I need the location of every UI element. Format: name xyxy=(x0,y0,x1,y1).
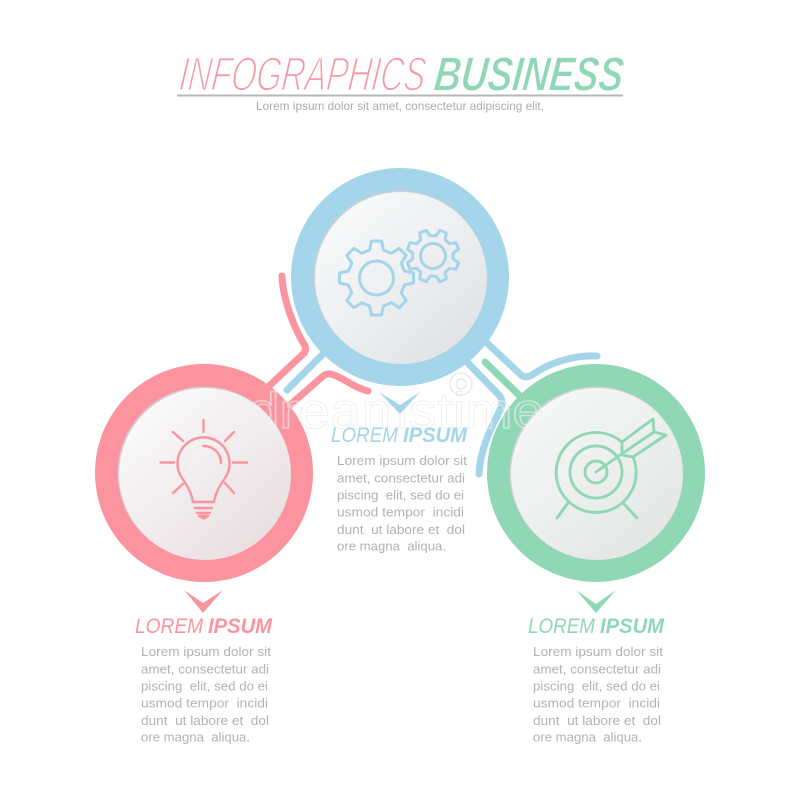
panel: blue circle xyxy=(291,168,509,386)
icon: light bulb xyxy=(160,420,247,518)
text block: green: dunt ut labore et dol xyxy=(533,713,661,728)
text block: blue: usmod tempor incidi xyxy=(337,505,464,520)
heading: green: IPSUM xyxy=(600,615,664,638)
text block: green xyxy=(533,644,663,745)
text block: green: ore magna aliqua. xyxy=(533,730,642,745)
subtitle: Lorem ipsum dolor sit amet, consectetur adipiscing elit, xyxy=(256,99,544,113)
heading: red xyxy=(135,615,272,638)
heading: red: IPSUM xyxy=(208,615,272,638)
text block: red xyxy=(141,644,271,745)
title underline xyxy=(177,94,623,96)
icon: target with arrow xyxy=(556,419,666,518)
connector: green xyxy=(485,362,522,398)
text block: red: amet, consectetur adi xyxy=(141,661,269,676)
text block: blue: ore magna aliqua. xyxy=(337,539,446,554)
connector: red upper xyxy=(268,276,306,387)
connector: blue lower right xyxy=(466,361,502,474)
title xyxy=(177,48,626,101)
heading: blue: LOREM xyxy=(331,424,398,447)
text block: green: piscing elit, sed do ei xyxy=(533,679,660,694)
connector: blue upper right xyxy=(486,342,597,377)
text block: blue: piscing elit, sed do ei xyxy=(337,488,464,503)
connectors xyxy=(268,276,597,474)
title word: business: BUSINESS xyxy=(432,48,626,101)
title word: infographics: INFOGRAPHICS xyxy=(177,48,428,101)
text block: blue: dunt ut labore et dol xyxy=(337,522,465,537)
text block: red: ore magna aliqua. xyxy=(141,730,250,745)
text block: blue xyxy=(337,453,467,554)
text block: green: amet, consectetur adi xyxy=(533,661,661,676)
watermark: dreamstime xyxy=(248,383,544,439)
heading: red: LOREM xyxy=(135,615,203,638)
text block: blue: Lorem ipsum dolor sit xyxy=(337,453,467,468)
connector: blue left xyxy=(287,352,325,390)
text block: green: usmod tempor incidi xyxy=(533,696,660,711)
heading: green xyxy=(528,615,664,638)
chevron: red xyxy=(184,590,223,613)
chevron: green xyxy=(576,590,616,613)
panel: green circle xyxy=(487,364,705,582)
chevron: blue xyxy=(379,392,420,414)
icon: gears xyxy=(340,222,467,315)
connector: red lower xyxy=(290,374,368,405)
text block: red: piscing elit, sed do ei xyxy=(141,679,268,694)
text block: green: Lorem ipsum dolor sit xyxy=(533,644,663,659)
text block: red: dunt ut labore et dol xyxy=(141,713,269,728)
text block: red: usmod tempor incidi xyxy=(141,696,268,711)
text block: red: Lorem ipsum dolor sit xyxy=(141,644,271,659)
text block: blue: amet, consectetur adi xyxy=(337,470,465,485)
heading: blue: IPSUM xyxy=(403,424,467,447)
heading: blue xyxy=(331,424,467,447)
heading: green: LOREM xyxy=(528,615,595,638)
panel: red circle xyxy=(95,364,313,582)
watermark: dreamstime xyxy=(248,383,544,439)
